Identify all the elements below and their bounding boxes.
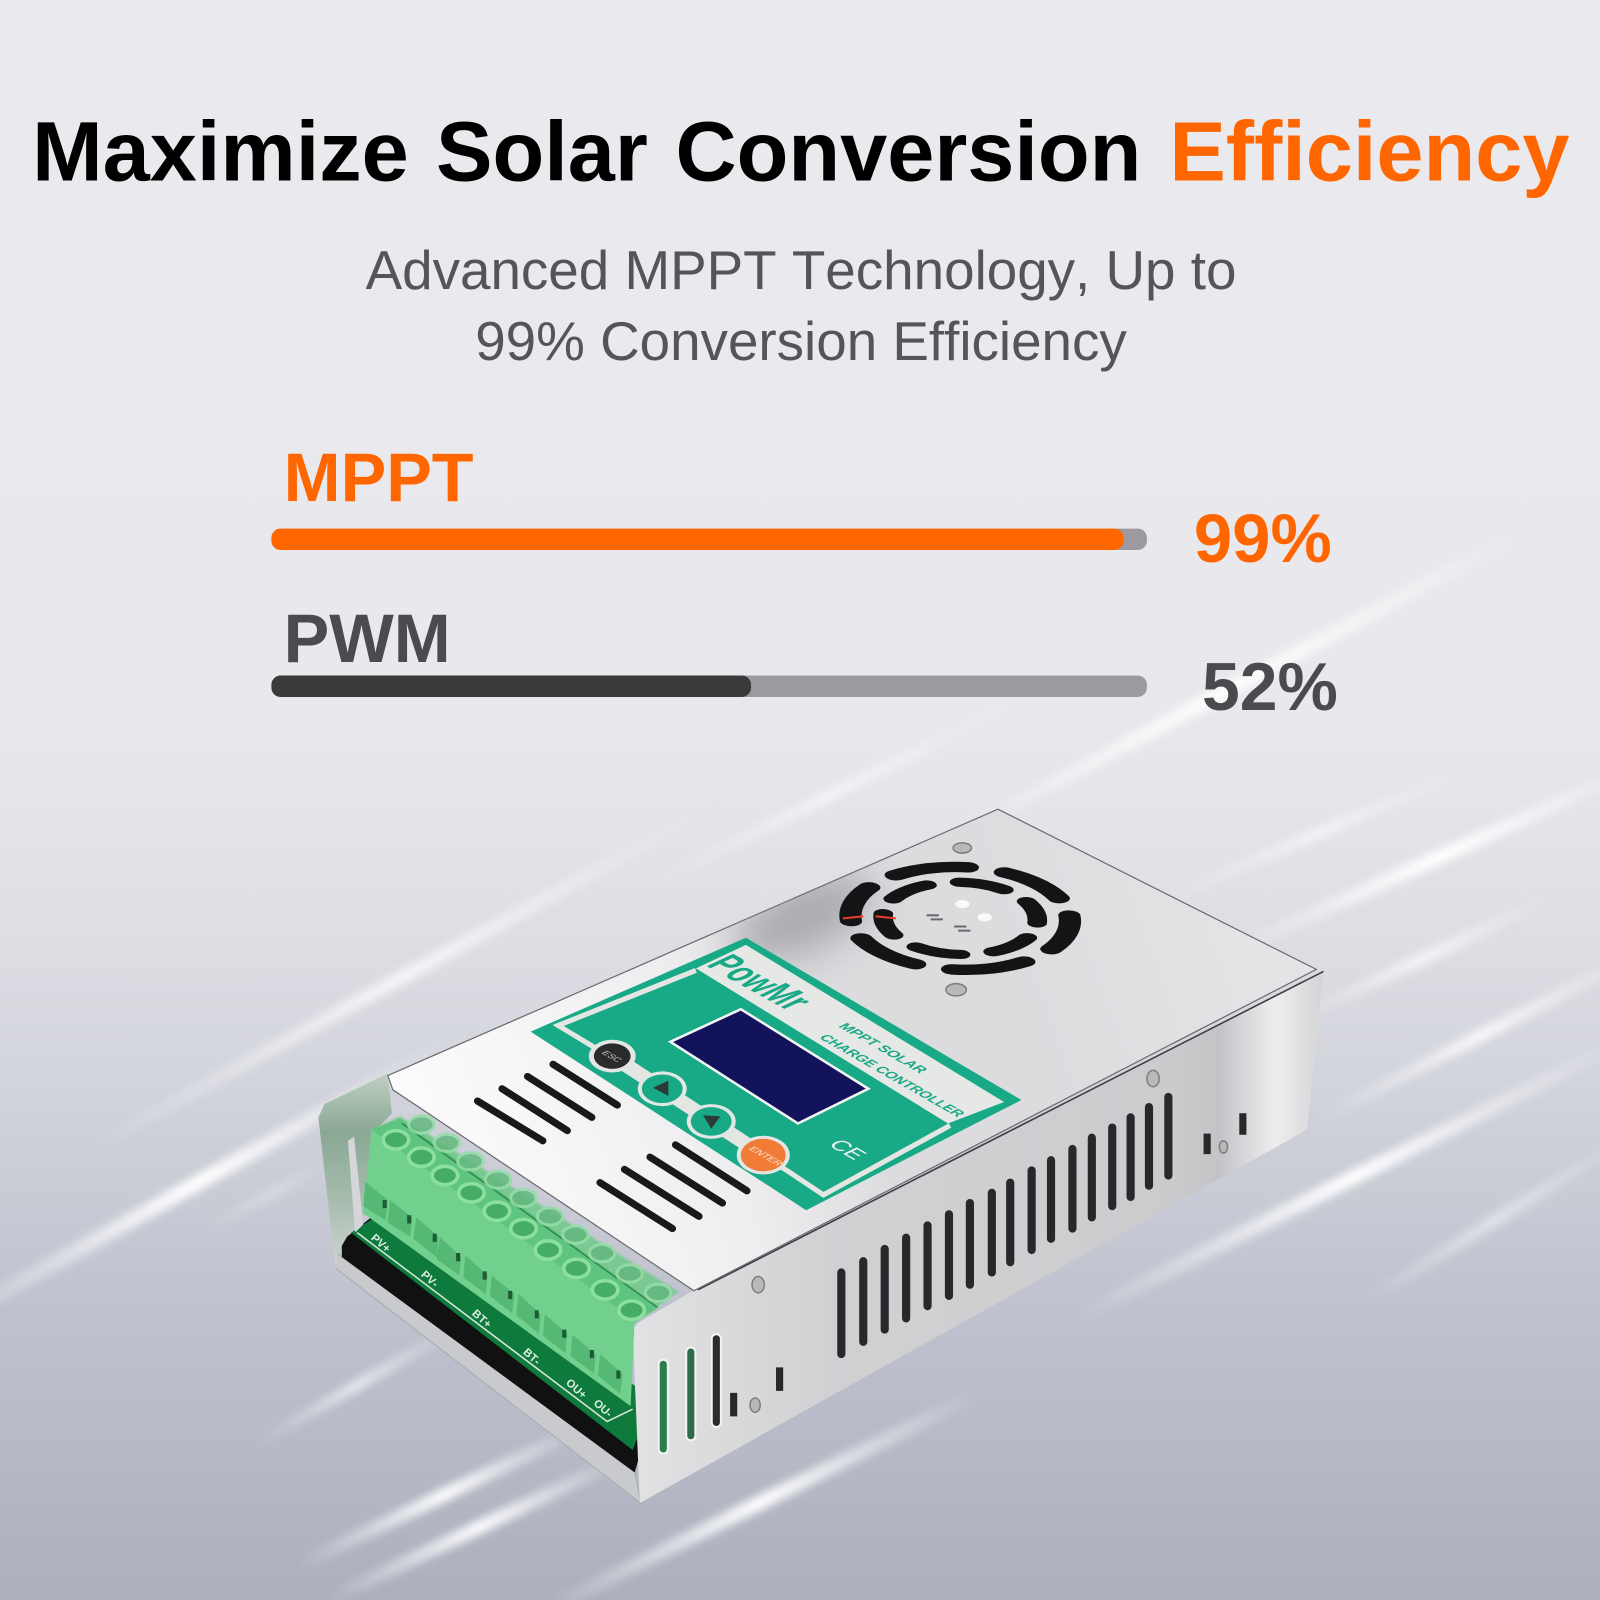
MPPT label: MPPT — [284, 440, 474, 516]
front hole ledge — [371, 1118, 659, 1322]
PWM bar — [271, 676, 751, 697]
enter button — [737, 1136, 790, 1174]
title: Conversion — [676, 104, 1141, 199]
top vent slots — [478, 1064, 747, 1229]
side ventilation slots — [841, 1097, 1168, 1354]
device base rail — [336, 1253, 641, 1503]
comparison chart: MPPT — [271, 440, 1332, 577]
front holes — [383, 1131, 644, 1319]
esc button — [589, 1040, 636, 1072]
circuit board: PV- — [418, 1269, 441, 1290]
top plate — [388, 809, 1316, 1291]
bracket slot — [348, 1137, 363, 1233]
brand name: PowMr — [696, 950, 822, 1016]
terminal notches — [385, 1200, 618, 1379]
screws — [750, 843, 1228, 1412]
title: Solar — [436, 104, 648, 199]
row divider — [402, 1123, 657, 1307]
light streaks — [0, 529, 1600, 1600]
product name: CHARGE CONTROLLER — [816, 1032, 969, 1119]
front side slots — [663, 1113, 1243, 1449]
circuit board: OU- — [591, 1397, 614, 1420]
down button — [687, 1104, 736, 1139]
title: Maximize — [32, 104, 409, 199]
control panel label: ENTER — [745, 1146, 785, 1167]
light brand band — [696, 945, 1004, 1123]
side highlight edge — [698, 971, 1323, 1290]
green terminal block — [363, 1116, 679, 1406]
circuit board — [351, 1214, 653, 1450]
light frame — [558, 970, 950, 1195]
front face — [363, 1130, 635, 1406]
MPPT bar — [271, 529, 1123, 550]
MPPT value: 99% — [1194, 500, 1332, 577]
display screen — [670, 1009, 868, 1123]
CE mark: CE — [823, 1136, 872, 1163]
subtitle: 99% Conversion Efficiency — [475, 310, 1127, 372]
PWM track — [271, 676, 1147, 697]
fan grille — [805, 846, 1115, 991]
PWM value: 52% — [1202, 650, 1338, 725]
rear holes — [409, 1116, 671, 1302]
up button — [638, 1071, 687, 1106]
product name: MPPT SOLAR — [835, 1021, 932, 1075]
title: Efficiency — [1169, 104, 1569, 199]
circuit board: BT- — [520, 1346, 543, 1368]
left end bracket — [318, 1073, 392, 1269]
fan hub marks — [927, 900, 992, 931]
product: MPPT charge controller — [318, 809, 1323, 1503]
circuit board: OU+ — [563, 1377, 589, 1402]
control panel label: ESC — [599, 1050, 625, 1064]
button track — [612, 1056, 763, 1155]
MPPT track — [271, 529, 1147, 550]
subtitle: Advanced MPPT Technology, Up to — [366, 239, 1236, 301]
circuit board: PV+ — [368, 1232, 393, 1256]
control panel label — [531, 938, 1021, 1210]
fan wire — [843, 916, 896, 918]
dark interior — [342, 1204, 653, 1472]
plate shading — [718, 856, 884, 980]
side panel — [633, 971, 1323, 1503]
circuit board: BT+ — [469, 1308, 494, 1331]
comparison chart: PWM — [271, 601, 1338, 725]
terminal recesses — [363, 1182, 622, 1394]
PWM label: PWM — [284, 601, 451, 677]
rear hole row — [371, 1116, 679, 1322]
subtitle — [366, 239, 1236, 372]
